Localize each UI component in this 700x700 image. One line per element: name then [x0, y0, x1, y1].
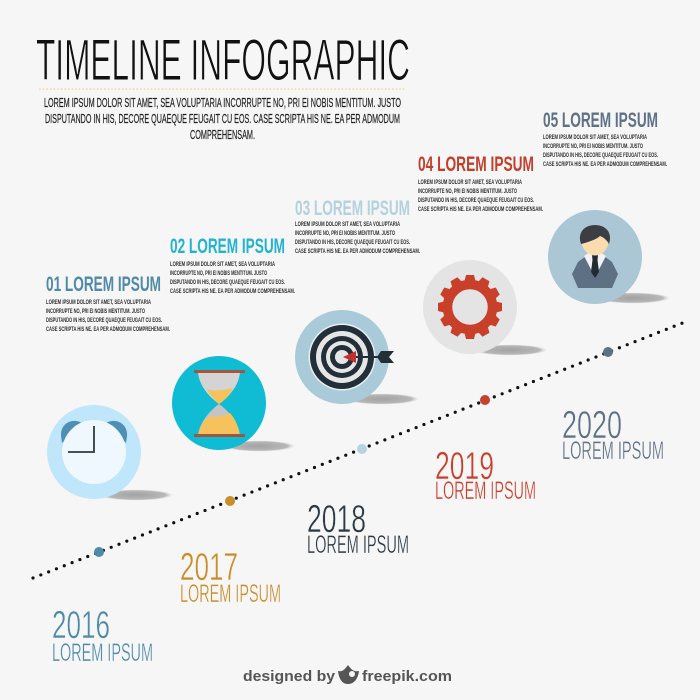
step 01 text: DISPUTANDO IN HIS, DECORE QUAEQUE FEUGAIT CU EOS.: [46, 317, 162, 324]
year label 2018: LOREM IPSUM: [307, 531, 409, 559]
step 01 text: CASE SCRIPTA HIS NE. EA PER ADMODUM COMPREHENSAM.: [46, 326, 170, 333]
icon: alarm clock: [47, 405, 173, 500]
milestone 2018: [357, 444, 367, 454]
year label 2020: 2020: [562, 404, 622, 447]
step 01 text: [46, 273, 170, 333]
step 03 text: INCORRUPTE NO, PRI EI NOBIS MENTITUM. JUSTO: [295, 230, 395, 237]
step 04 text: DISPUTANDO IN HIS, DECORE QUAEQUE FEUGAIT CU EOS.: [418, 197, 534, 204]
year label 2016: 2016: [52, 604, 110, 647]
intro text: DISPUTANDO IN HIS, DECORE QUAEQUE FEUGAIT CU EOS. CASE SCRIPTA HIS NE. EA PER ADMODUM: [45, 112, 400, 126]
step 01 text: 01 LOREM IPSUM: [46, 273, 161, 296]
intro text: LOREM IPSUM DOLOR SIT AMET, SEA VOLUPTARIA INCORRUPTE NO, PRI EI NOBIS MENTITUM. JUSTO: [44, 96, 401, 110]
step 04 text: LOREM IPSUM DOLOR SIT AMET, SEA VOLUPTARIA: [418, 179, 522, 186]
step 02 text: DISPUTANDO IN HIS, DECORE QUAEQUE FEUGAIT CU EOS.: [170, 279, 285, 286]
year label 2019: [435, 445, 536, 505]
step 01 text: INCORRUPTE NO, PRI EI NOBIS MENTITUM. JUSTO: [46, 308, 145, 315]
icon: hourglass: [172, 356, 295, 452]
timeline dotted line: [33, 322, 685, 578]
year label 2017: 2017: [180, 546, 238, 589]
step 04 text: INCORRUPTE NO, PRI EI NOBIS MENTITUM. JUSTO: [418, 188, 517, 195]
step 03 text: LOREM IPSUM DOLOR SIT AMET, SEA VOLUPTARIA: [295, 221, 400, 228]
year label 2018: [307, 498, 409, 559]
step 03 text: [295, 197, 420, 255]
year label 2017: [180, 546, 281, 608]
year label 2019: LOREM IPSUM: [435, 477, 536, 505]
step 03 text: 03 LOREM IPSUM: [295, 197, 410, 220]
year label 2018: 2018: [307, 498, 366, 541]
step 03 text: DISPUTANDO IN HIS, DECORE QUAEQUE FEUGAIT CU EOS.: [295, 239, 410, 246]
year label 2020: [562, 404, 664, 465]
step 02 text: [170, 235, 295, 295]
step 05 text: [543, 109, 667, 168]
intro text: [44, 96, 401, 142]
milestone 2017: [225, 496, 235, 506]
icon: target: [295, 310, 419, 404]
milestone 2019: [480, 395, 490, 405]
step 04 text: 04 LOREM IPSUM: [418, 153, 534, 176]
intro text: COMPREHENSAM.: [190, 128, 255, 142]
step 02 text: CASE SCRIPTA HIS NE. EA PER ADMODUM COMPREHENSAM.: [170, 288, 295, 295]
year label 2016: LOREM IPSUM: [52, 639, 153, 667]
icon: gear: [423, 260, 547, 356]
step 04 text: CASE SCRIPTA HIS NE. EA PER ADMODUM COMPREHENSAM.: [418, 206, 543, 213]
step 04 text: [418, 153, 543, 213]
year label 2019: 2019: [435, 445, 494, 488]
milestone 2020: [603, 347, 613, 357]
footer credit: [243, 665, 452, 685]
step 02 text: LOREM IPSUM DOLOR SIT AMET, SEA VOLUPTARIA: [170, 261, 275, 268]
step 02 text: 02 LOREM IPSUM: [170, 235, 285, 258]
step 01 text: LOREM IPSUM DOLOR SIT AMET, SEA VOLUPTARIA: [46, 299, 151, 306]
year label 2017: LOREM IPSUM: [180, 580, 281, 608]
footer credit: designed by: [243, 668, 336, 685]
step 02 text: INCORRUPTE NO, PRI EI NOBIS MENTITUM. JUSTO: [170, 270, 267, 277]
step 03 text: CASE SCRIPTA HIS NE. EA PER ADMODUM COMPREHENSAM.: [295, 248, 420, 255]
year label 2016: [52, 604, 153, 667]
icon: businessman: [548, 210, 670, 304]
footer credit: freepik.com: [362, 668, 452, 685]
milestone 2016: [94, 547, 104, 557]
